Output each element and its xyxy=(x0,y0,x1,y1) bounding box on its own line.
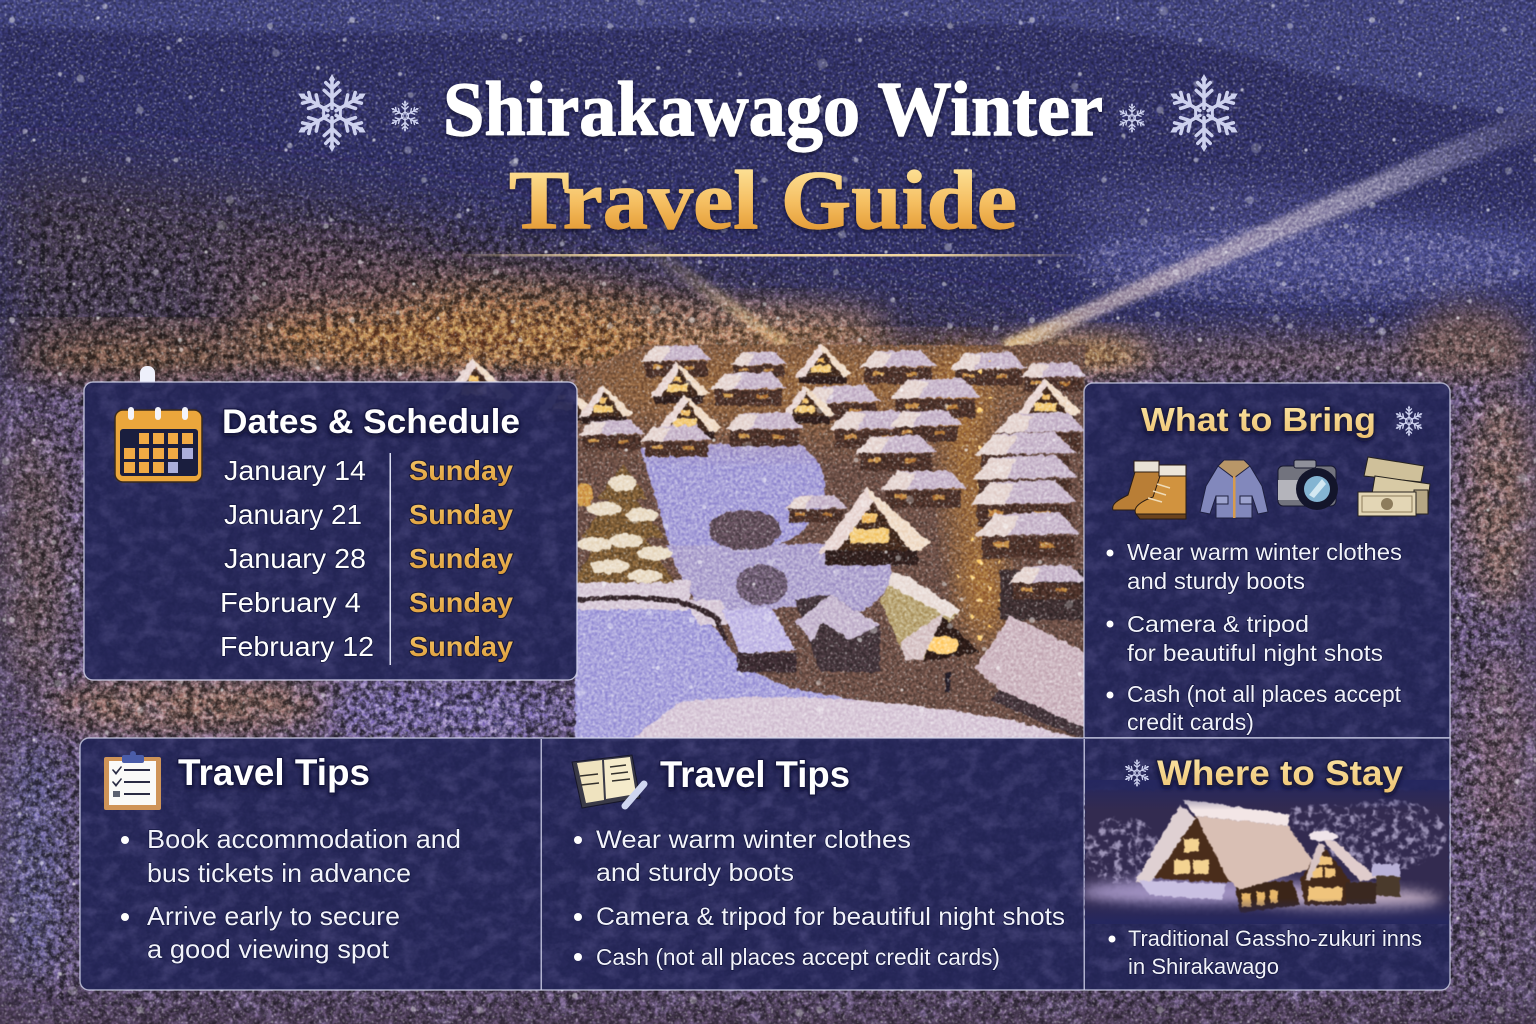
tips list: Camera & tripod for beautiful night shots xyxy=(596,903,1065,931)
bushes by field xyxy=(709,510,781,550)
icon: open book and pen xyxy=(572,755,644,808)
icon: small snowflake left xyxy=(390,100,420,132)
bring list: Camera & tripod xyxy=(1127,611,1309,637)
right stacked roofs xyxy=(975,432,1076,476)
title line two: Travel Guide xyxy=(509,154,1017,247)
golden forest glow xyxy=(235,293,705,377)
heading: dates & schedule: Dates & Schedule xyxy=(222,403,520,441)
lower snow forest xyxy=(0,360,1536,1024)
tips list: Wear warm winter clothes xyxy=(596,826,911,854)
icon: snowflake xyxy=(1394,406,1424,436)
village scene xyxy=(440,339,1087,740)
large near roof xyxy=(1000,570,1085,620)
schedule list: Sunday xyxy=(409,587,513,618)
dark mountains xyxy=(0,25,1536,400)
tips list xyxy=(574,826,1065,970)
snowed barn xyxy=(722,608,796,672)
tips list: bus tickets in advance xyxy=(147,858,411,888)
panel: dates & schedule xyxy=(84,366,577,680)
bring list: and sturdy boots xyxy=(1127,568,1305,594)
schedule list: Sunday xyxy=(409,631,513,662)
calendar pin tab xyxy=(140,366,155,388)
heading: where to stay: Where to Stay xyxy=(1157,754,1404,793)
photo bottom fade xyxy=(1085,898,1449,924)
panel: travel tips middle xyxy=(572,754,1065,970)
pine tree xyxy=(572,464,674,582)
tips list: Cash (not all places accept credit cards) xyxy=(596,944,1000,970)
schedule list: January 28 xyxy=(224,543,366,574)
photo top fade xyxy=(1085,780,1449,810)
schedule list: Sunday xyxy=(409,499,513,530)
bring list: Wear warm winter clothes xyxy=(1127,539,1402,565)
gold street glow xyxy=(937,339,999,601)
bring list: credit cards) xyxy=(1127,709,1254,735)
right hillside light band xyxy=(1070,215,1536,295)
left dark forest xyxy=(0,170,1040,410)
heading: travel tips: Travel Tips xyxy=(178,752,370,793)
icon: camera xyxy=(1278,460,1338,510)
schedule list: February 12 xyxy=(220,631,374,662)
schedule list: February 4 xyxy=(220,587,361,618)
snowy trees behind the inn xyxy=(1084,799,1447,884)
light beams xyxy=(1000,104,1536,352)
bring list: for beautiful night shots xyxy=(1127,640,1383,666)
lit centre house xyxy=(785,495,847,522)
heading: what to bring: What to Bring xyxy=(1141,401,1376,438)
icon: jacket xyxy=(1200,460,1268,518)
schedule list xyxy=(220,453,513,665)
icon: boots xyxy=(1113,461,1186,519)
gold street lights xyxy=(955,360,1000,640)
tips list: Arrive early to secure xyxy=(147,901,400,931)
schedule list: Sunday xyxy=(409,455,513,486)
bring list: Cash (not all places accept xyxy=(1127,681,1402,707)
icon: calendar xyxy=(115,407,202,482)
panel: travel tips left xyxy=(104,751,461,964)
middle dark house xyxy=(795,595,880,672)
panel: what to bring xyxy=(1084,383,1450,738)
icon: snowflake xyxy=(1123,759,1151,787)
icon: large snowflake left xyxy=(294,74,370,152)
icon: large snowflake right xyxy=(1166,74,1242,152)
snow fields xyxy=(640,444,825,558)
tips list xyxy=(121,824,461,964)
tips list: Book accommodation and xyxy=(147,824,461,854)
title rule xyxy=(450,254,1090,256)
stay list: in Shirakawago xyxy=(1128,954,1279,979)
tips list: and sturdy boots xyxy=(596,859,794,887)
tips list: a good viewing spot xyxy=(147,934,390,964)
panel: bottom strip xyxy=(80,738,1450,990)
right ridge forest xyxy=(944,332,1536,392)
schedule list: January 14 xyxy=(224,455,366,486)
icon: small snowflake right xyxy=(1118,103,1146,133)
photo: gassho-zukuri inn xyxy=(1080,790,1449,920)
stay list: Traditional Gassho-zukuri inns xyxy=(1128,926,1422,951)
icon: cash xyxy=(1358,457,1430,516)
schedule list: January 21 xyxy=(224,499,362,530)
title line one: Shirakawago Winter xyxy=(443,66,1103,152)
stay list xyxy=(1108,926,1422,979)
icon: clipboard xyxy=(104,751,161,810)
blotchy snow patches on lower forest xyxy=(0,385,1536,1024)
heading: travel tips: Travel Tips xyxy=(660,754,850,795)
distant houses, back rows xyxy=(640,345,712,376)
panel: where to stay xyxy=(1080,754,1449,979)
large lit house with lamp xyxy=(880,572,980,693)
title block xyxy=(294,66,1242,256)
bring list xyxy=(1106,539,1402,735)
snowy patches on right hillside xyxy=(1070,225,1530,305)
schedule list: Sunday xyxy=(409,543,513,574)
